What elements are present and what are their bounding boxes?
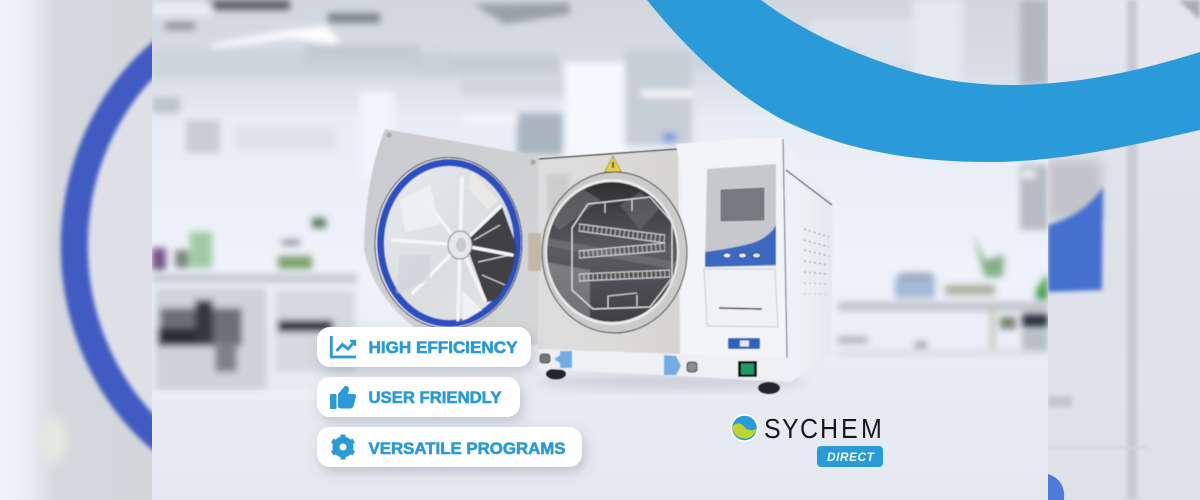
label: versatile programs: VERSATILE PROGRAMS (368, 439, 566, 458)
feature pill: high efficiency (317, 327, 531, 367)
shadow under machine (535, 374, 805, 390)
vent slots (804, 229, 829, 294)
background panel: blurred right close-up of control panel (1048, 0, 1200, 500)
right laboratory benches (838, 235, 1048, 356)
badge: direct (817, 446, 883, 467)
feature pill: user friendly (317, 377, 520, 417)
background panel: blurred laboratory photo (152, 0, 1048, 390)
blue connector stickers and valves (540, 351, 697, 375)
icon: line chart (331, 336, 356, 357)
USB port label (728, 338, 760, 349)
green power switch (738, 361, 757, 377)
feet (546, 368, 780, 394)
trays (579, 224, 670, 281)
badge: direct: DIRECT (827, 450, 876, 464)
door hinge (528, 233, 541, 271)
autoclave steriliser machine (364, 129, 833, 394)
bottom base strip (538, 348, 790, 382)
white control housing (676, 138, 788, 358)
warning triangle (604, 156, 622, 172)
icon: thumbs up (330, 386, 356, 409)
wordmark: SYCHEM (764, 413, 882, 444)
right side casing (783, 138, 833, 382)
icon: gear (332, 434, 354, 460)
label: high efficiency: HIGH EFFICIENCY (368, 338, 518, 357)
control panel (705, 164, 776, 267)
ceiling shapes and lights (152, 0, 1048, 230)
central hub (448, 231, 472, 259)
open door plate (364, 129, 539, 345)
wire rack (572, 197, 672, 309)
feature pill: versatile programs (317, 427, 582, 467)
printer door (704, 269, 778, 327)
icon: Sychem swirl globe (730, 414, 758, 442)
label: user friendly: USER FRIENDLY (368, 388, 502, 407)
floor (152, 392, 322, 398)
left laboratory benches (152, 218, 357, 390)
chamber opening (542, 172, 687, 333)
front stainless panel (538, 148, 680, 354)
door window with blue gasket (375, 158, 522, 328)
curved blue arc band (647, 0, 1200, 162)
logo: Sychem Direct (730, 413, 883, 467)
background panel: blurred left close-up of door gasket (0, 0, 152, 500)
